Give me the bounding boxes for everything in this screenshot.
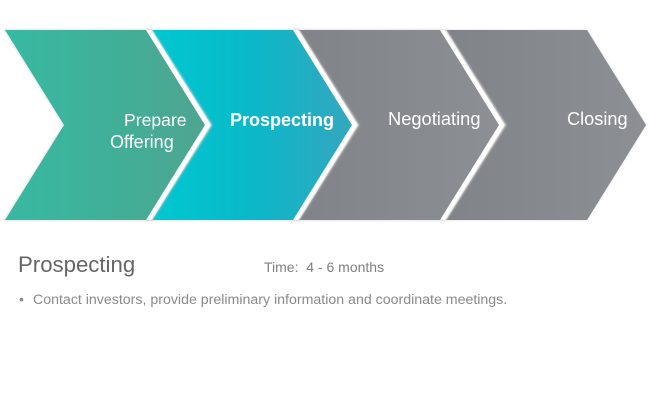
heading: Prospecting [18,252,135,277]
chevron: Closing [446,30,646,220]
bullet: • [19,291,24,307]
label: Negotiating: Negotiating [388,108,480,129]
label: Offering: Offering [110,132,174,152]
chevron: Prospecting [145,30,359,220]
time estimate: Time: 4 - 6 months [264,259,384,275]
chevron: Negotiating [292,30,506,220]
label: Prospecting: Prospecting [230,110,334,130]
chevron: Prepare Offering [5,30,212,220]
label: Closing: Closing [567,109,628,129]
bullet text: Contact investors, provide preliminary information and coordinate meetings. [33,292,507,308]
label: Prepare: Prepare [124,110,187,130]
